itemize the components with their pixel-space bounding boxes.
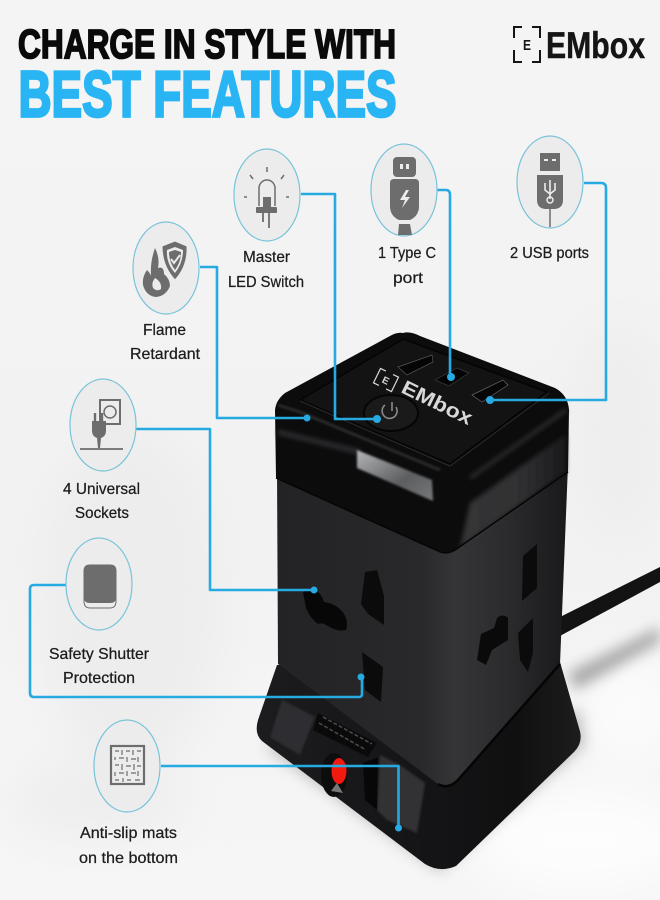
device logo: EMbox	[398, 377, 476, 430]
base label strip	[313, 713, 377, 757]
left socket round hole	[303, 589, 347, 630]
title: BEST FEATURES	[18, 58, 396, 130]
label: Sockets	[75, 505, 129, 522]
label: Flame	[143, 322, 186, 339]
label	[79, 825, 178, 867]
label: Anti-slip mats	[80, 825, 177, 842]
feature: type C port	[371, 144, 437, 287]
label: Retardant	[130, 346, 201, 363]
feature: master LED switch	[228, 149, 304, 291]
base shadow	[262, 710, 585, 872]
left socket lower slot	[362, 652, 383, 702]
product: power tower	[257, 332, 660, 872]
label	[378, 245, 436, 287]
feature: USB ports	[510, 136, 589, 262]
cap seam	[276, 472, 568, 553]
right socket round hole	[477, 616, 508, 665]
icon: LED	[244, 167, 289, 228]
feature: flame retardant	[130, 222, 201, 363]
icon: USB C plug	[390, 157, 419, 235]
callout end dots	[304, 373, 494, 832]
logo: EMbox	[514, 25, 645, 66]
label: 1 Type C	[378, 245, 436, 262]
body	[277, 465, 568, 786]
icon: mat	[111, 746, 144, 784]
cap right face	[460, 434, 566, 548]
base left foot panel	[270, 700, 315, 755]
icon: flame and shield	[143, 241, 187, 297]
label: on the bottom	[79, 850, 178, 867]
feature: safety shutter	[49, 538, 150, 687]
label: Master	[243, 249, 291, 266]
label: LED Switch	[228, 274, 304, 291]
icon: USB plug	[537, 153, 563, 227]
label: 2 USB ports	[510, 245, 589, 262]
power cord	[558, 567, 660, 637]
label	[130, 322, 201, 363]
device logo: E	[380, 375, 391, 388]
label	[49, 646, 150, 687]
usb port left	[398, 355, 433, 375]
logo: EMbox: E	[523, 37, 531, 54]
device logo	[374, 368, 476, 430]
feature: anti-slip mats	[79, 720, 178, 867]
label: 4 Universal	[63, 481, 140, 498]
label	[63, 481, 140, 522]
cap rim highlight	[278, 432, 360, 452]
cap	[275, 332, 569, 553]
base	[257, 662, 581, 869]
top face	[300, 339, 547, 464]
label: port	[393, 270, 424, 287]
red switch	[321, 753, 347, 797]
icon: shutter	[84, 565, 116, 608]
base groove	[363, 757, 378, 810]
power button	[364, 395, 418, 431]
title	[18, 21, 396, 130]
callout lines	[30, 183, 606, 828]
cord shadow	[568, 627, 660, 690]
usb port right	[472, 380, 508, 402]
right socket upper slot	[522, 544, 537, 601]
status window reflection	[357, 450, 433, 501]
feature: universal sockets	[63, 379, 140, 522]
icon: plug and socket	[80, 400, 123, 449]
label	[228, 249, 304, 291]
title: CHARGE IN STYLE WITH	[18, 21, 396, 67]
label: Protection	[63, 670, 135, 687]
base right foot panel	[377, 755, 425, 833]
left socket upper slot	[361, 570, 384, 625]
right socket lower slot	[518, 618, 533, 672]
label: Safety Shutter	[49, 646, 150, 663]
type c port	[435, 368, 469, 386]
